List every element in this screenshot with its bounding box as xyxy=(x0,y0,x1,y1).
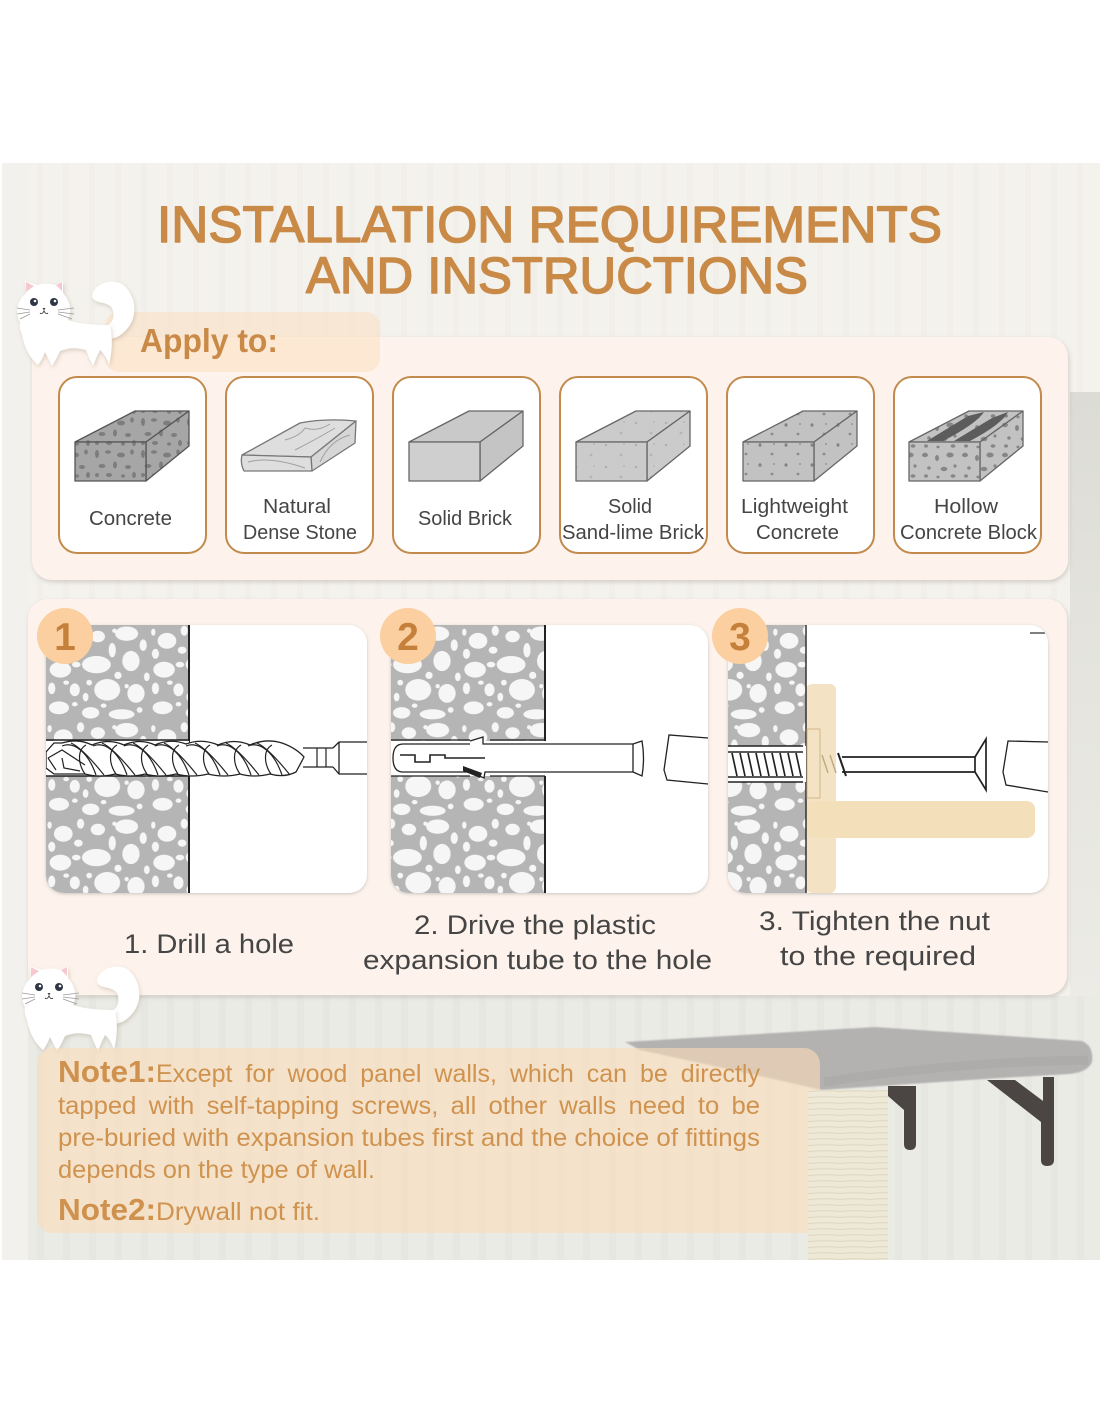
step 1 diagram: drill a hole xyxy=(46,625,367,893)
card: solid sand-lime brick: Sand-lime Brick xyxy=(562,521,705,544)
cat bottom xyxy=(22,966,139,1051)
caption 3: 3. Tighten the nut xyxy=(759,906,991,936)
caption 1: 1. Drill a hole xyxy=(124,929,294,959)
card: solid sand-lime brick: Solid xyxy=(608,495,652,518)
badge 1: 1 xyxy=(54,616,76,659)
card: solid brick: Solid Brick xyxy=(418,507,513,530)
card: hollow concrete block: Hollow xyxy=(934,495,998,518)
caption 3: to the required xyxy=(780,941,976,971)
note 2 xyxy=(58,1192,320,1227)
card: concrete xyxy=(59,377,206,553)
card: hollow concrete block: Concrete Block xyxy=(900,521,1038,544)
icon: solid brick xyxy=(409,411,523,481)
heading tab: apply to xyxy=(105,312,380,372)
icon: sand-lime brick xyxy=(576,411,690,481)
bracket right xyxy=(987,1077,1054,1166)
card: hollow concrete block xyxy=(894,377,1041,553)
card: natural dense stone: Natural xyxy=(263,495,331,518)
note 2: Drywall not fit. xyxy=(156,1198,320,1226)
title: AND INSTRUCTIONS xyxy=(306,247,808,304)
caption 3 xyxy=(759,906,991,971)
card: concrete: Concrete xyxy=(89,507,172,530)
background photo wall xyxy=(2,163,1100,1260)
note 1: Note1: xyxy=(58,1054,156,1089)
caption 2: 2. Drive the plastic xyxy=(414,910,656,940)
card: natural dense stone: Dense Stone xyxy=(243,521,357,544)
title xyxy=(157,196,942,304)
icon: lightweight concrete brick xyxy=(743,411,857,481)
note 1: tapped with self-tapping screws, all other walls need to be xyxy=(58,1092,760,1120)
icon: concrete brick xyxy=(75,411,189,481)
badge 1 xyxy=(37,608,93,664)
caption 2 xyxy=(363,910,712,975)
step 3 diagram: tighten the nut xyxy=(728,625,1048,893)
bracket left xyxy=(888,1086,916,1150)
card: solid brick xyxy=(393,377,540,553)
shelf and scratching post photo xyxy=(625,1027,1092,1166)
badge 3: 3 xyxy=(729,616,751,659)
card: lightweight concrete xyxy=(727,377,874,553)
panel: notes xyxy=(37,1048,820,1233)
step 2 diagram: plastic expansion tube xyxy=(391,625,708,893)
icon: natural stone xyxy=(241,420,356,471)
badge 2 xyxy=(380,608,436,664)
note 1: pre-buried with expansion tubes first and the choice of fittings xyxy=(58,1124,760,1152)
card: lightweight concrete: Concrete xyxy=(756,521,839,544)
chuck xyxy=(664,735,708,784)
chuck xyxy=(1003,741,1048,792)
icon: hollow block xyxy=(909,411,1023,481)
panel: steps xyxy=(28,599,1067,995)
note 2: Note2: xyxy=(58,1192,156,1227)
scratching post xyxy=(808,1090,888,1260)
note 1: depends on the type of wall. xyxy=(58,1156,375,1184)
note 1 xyxy=(58,1054,760,1184)
note 1: Except for wood panel walls, which can be directly xyxy=(156,1060,760,1088)
card: natural dense stone xyxy=(226,377,373,553)
cat top xyxy=(17,281,134,366)
caption 2: expansion tube to the hole xyxy=(363,945,712,975)
heading tab: apply to: Apply to: xyxy=(140,322,278,359)
title: INSTALLATION REQUIREMENTS xyxy=(157,196,942,253)
card: solid sand-lime brick xyxy=(560,377,707,553)
card: lightweight concrete: Lightweight xyxy=(741,495,848,518)
panel: apply to xyxy=(32,312,1068,580)
badge 2: 2 xyxy=(397,616,419,659)
badge 3 xyxy=(712,608,768,664)
